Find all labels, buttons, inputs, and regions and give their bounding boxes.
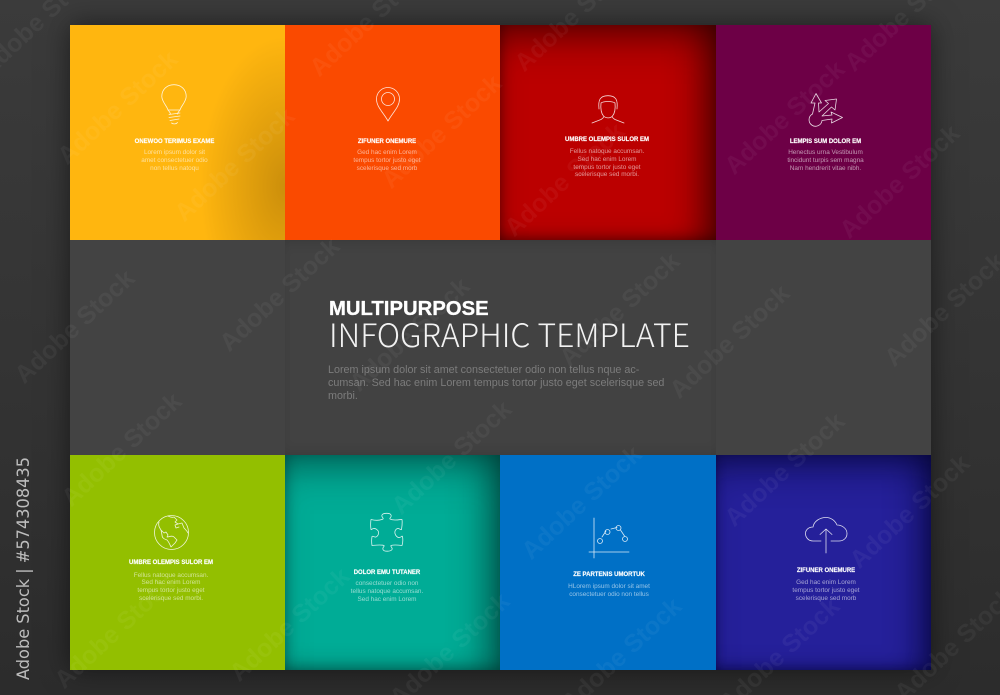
watermark: Adobe Stock <box>52 45 183 170</box>
panel: navy cloud <box>716 455 931 670</box>
panel: board shadow <box>70 25 931 670</box>
watermark: Adobe Stock <box>844 449 975 574</box>
watermark: Adobe Stock <box>376 69 507 194</box>
watermark: Adobe Stock <box>169 102 300 227</box>
icon: map pin <box>376 87 400 122</box>
text block: tempus tortor justo eget <box>137 587 205 594</box>
text block: tellus natoque accumsan. <box>351 588 423 595</box>
text block <box>570 148 644 178</box>
heading: UMBRE OLEMPIS SULOR EM <box>565 137 649 143</box>
text block: tempus tortor justo eget <box>573 164 641 170</box>
watermark: Adobe Stock <box>386 395 517 520</box>
panel: green globe <box>70 455 285 670</box>
text block <box>353 149 421 172</box>
watermark: Adobe Stock <box>719 407 850 532</box>
text block: consectetuer odio non tellus <box>569 591 649 598</box>
text block: non tellus natoqu <box>150 164 199 172</box>
text block: tempus tortor justo eget <box>792 587 860 594</box>
panel: yellow idea <box>70 25 285 240</box>
panel: teal puzzle <box>285 455 500 670</box>
panel: orange location <box>285 25 500 240</box>
icon: puzzle piece <box>370 512 404 552</box>
panel: red person <box>500 25 716 240</box>
heading: ZE PARTENIS UMORTUK <box>573 572 645 578</box>
icon: line chart <box>588 518 630 558</box>
text block <box>787 149 864 172</box>
text block: intro: cumsan. Sed hac enim Lorem tempus tortor justo eget scelerisque sed <box>328 377 664 389</box>
title <box>329 298 690 357</box>
text block: scelerisque sed morb <box>357 164 417 172</box>
text block: Sed hac enim Lorem <box>142 579 200 586</box>
text block <box>350 580 423 603</box>
watermark: Adobe Stock <box>499 117 630 242</box>
heading: infographic template: INFOGRAPHIC TEMPLATE <box>329 311 690 357</box>
text block: Sed hac enim Lorem <box>358 596 416 603</box>
heading: DOLOR EMU TUTANER <box>354 570 420 576</box>
watermark: Adobe Stock <box>554 247 685 372</box>
text block: intro: morbi. <box>328 390 358 402</box>
heading: UMBRE OLEMPIS SULOR EM <box>129 560 213 566</box>
panel: center background <box>70 240 931 455</box>
panel: blue chart <box>500 455 716 670</box>
text block: Fellus natoque accumsan. <box>134 572 208 578</box>
heading: ONEWOO TERIMUS EXAME <box>135 138 214 144</box>
text block: Ged hac enim Lorem <box>796 579 856 586</box>
watermark: Adobe Stock <box>834 119 965 244</box>
icon: person head <box>592 95 624 124</box>
text block: Henectus urna Vestibulum <box>788 149 863 156</box>
text block: consectetuer odio non <box>356 580 418 587</box>
icon: three arrows <box>808 93 843 127</box>
text block <box>141 149 208 172</box>
text block <box>792 579 860 602</box>
icon: globe <box>154 515 189 550</box>
text block: scelerisque sed morbi. <box>575 171 639 178</box>
icon: light bulb <box>161 84 187 124</box>
text block: amet consectetuer odio <box>141 157 208 164</box>
watermark: Adobe Stock <box>664 279 795 404</box>
text block: scelerisque sed morbi. <box>139 595 203 602</box>
watermark: Adobe Stock <box>56 387 187 512</box>
text block <box>568 583 650 598</box>
text block: HLorem ipsum dolor sit amet <box>568 583 650 590</box>
watermark: Adobe Stock <box>49 569 180 694</box>
text block: intro: Lorem ipsum dolor sit amet consectetuer odio non tellus nque ac- <box>328 364 639 376</box>
text block: Ged hac enim Lorem <box>357 149 417 156</box>
text block: scelerisque sed morb <box>796 595 856 602</box>
watermark: Adobe Stock <box>516 440 647 565</box>
panel: purple arrows <box>716 25 931 240</box>
heading: ZIFUNER ONEMURE <box>358 138 416 144</box>
watermark: Adobe Stock <box>214 232 345 357</box>
panel: center column shading <box>285 240 716 455</box>
text block: Nam hendrerit vitae nibh. <box>790 165 861 172</box>
text block: tincidunt turpis sem magna <box>787 157 864 164</box>
panel shadow <box>70 25 285 240</box>
text block: Fellus natoque accumsan. <box>570 148 644 155</box>
watermark: Adobe Stock <box>224 562 355 687</box>
text block: tempus tortor justo eget <box>353 157 421 164</box>
heading: ZIFUNER ONEMURE <box>797 568 855 574</box>
heading: LEMPIS SUM DOLOR EM <box>790 139 861 145</box>
icon: cloud upload <box>805 517 848 554</box>
watermark: Adobe Stock <box>9 264 140 389</box>
text block: intro <box>328 364 664 402</box>
watermark: Adobe Stock <box>344 272 475 397</box>
watermark: Adobe Stock <box>719 55 850 180</box>
heading: multipurpose: MULTIPURPOSE <box>329 298 489 320</box>
text block: Lorem ipsum dolor sit <box>144 149 205 156</box>
text block: Sed hac enim Lorem <box>578 156 636 163</box>
text block <box>134 572 208 602</box>
